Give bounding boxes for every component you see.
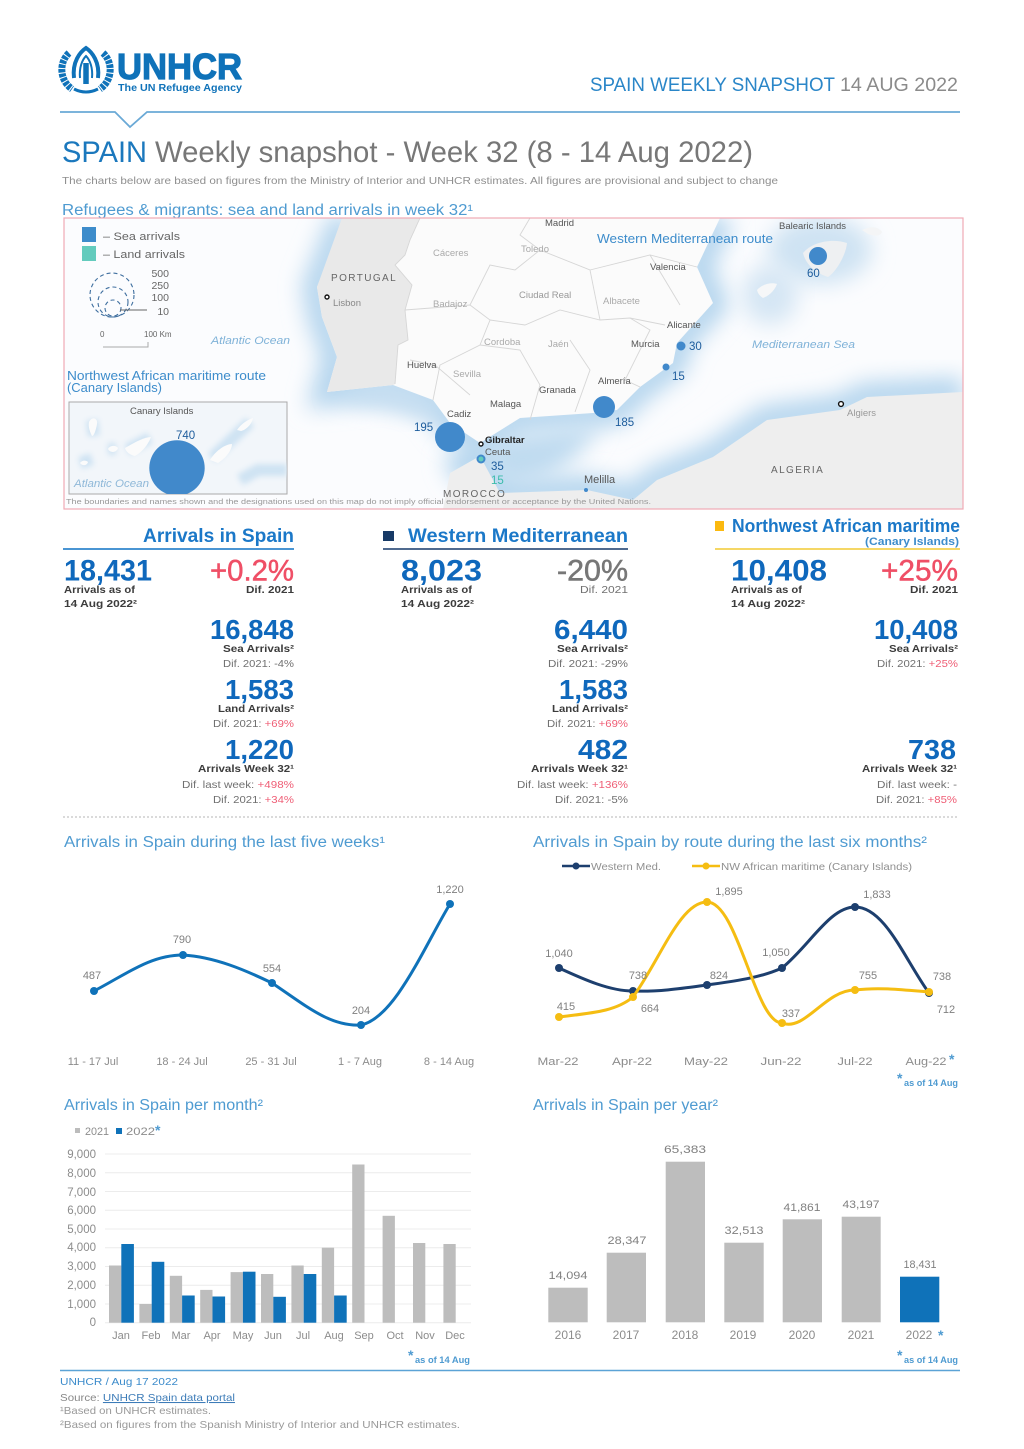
panel: Western Mediterranean: Dif. last week: +136% [517, 779, 628, 791]
panel: map: Lisbon [333, 298, 361, 309]
header rule with notch [60, 112, 960, 127]
panel: map: Melilla [584, 474, 616, 486]
chart: by route: 824 [710, 970, 728, 982]
sea labels [210, 335, 855, 351]
chart: per year: 18,431 [904, 1259, 936, 1271]
Balearic Islands [803, 241, 847, 277]
chart: by route: 1,895 [715, 886, 743, 898]
panel: Northwest African maritime: Sea Arrivals² [889, 643, 959, 655]
map bubbles [435, 247, 827, 492]
chart: last five weeks: 204 [352, 1005, 370, 1017]
place labels [433, 244, 640, 380]
panel: map: Alicante [667, 320, 701, 331]
panel: Northwest African maritime: 738 [908, 734, 956, 765]
panel: Northwest African maritime: Dif. 2021: +25% [877, 658, 958, 670]
chart: by route: Jul-22 [838, 1056, 872, 1068]
map legend: 10 [157, 306, 169, 318]
chart: per month: Jun [264, 1330, 282, 1342]
panel: arrivals in Spain: 1,220 [225, 734, 294, 765]
chart: per year: 2016 [555, 1328, 582, 1342]
place labels: Badajoz [433, 299, 468, 310]
chart: per year: 41,861 [784, 1202, 820, 1214]
panel: arrivals in Spain: 16,848 [210, 614, 294, 645]
chart: per year: 65,383 [664, 1144, 706, 1156]
panel: Northwest African maritime: Dif. 2021 [910, 584, 958, 596]
place labels: Cáceres [433, 248, 469, 259]
heading: Arrivals in Spain during the last five weeks¹ [64, 834, 385, 851]
chart: per month: 8,000 [67, 1168, 96, 1180]
chart: per month: Jan [112, 1330, 130, 1342]
panel: map [64, 216, 963, 509]
panel: map: Gibraltar [485, 435, 525, 446]
panel: Northwest African maritime: 10,408 [874, 614, 958, 645]
chart: by route [533, 834, 958, 1089]
map legend: 500 [151, 268, 169, 280]
footer: ¹Based on UNHCR estimates. [60, 1405, 211, 1417]
panel: arrivals in Spain: Arrivals Week 32¹ [198, 763, 295, 775]
panel: map: PORTUGAL [331, 273, 397, 284]
chart: per month [64, 1097, 471, 1366]
chart: by route: May-22 [684, 1056, 728, 1068]
map legend: 250 [151, 280, 169, 292]
chart: by route: Aug-22 [906, 1056, 946, 1068]
route label: Western Mediterranean: Western Mediterranean route [597, 232, 773, 246]
chart: per month: 2,000 [67, 1280, 96, 1292]
title: SPAIN [62, 136, 147, 169]
map legend: 100 Km [144, 330, 172, 339]
header label: 14 AUG 2022 [840, 75, 958, 96]
map legend: – Sea arrivals [103, 231, 181, 243]
chart: last five weeks [64, 834, 474, 1068]
panel: map: Madrid [545, 218, 574, 229]
chart: per year: 43,197 [842, 1199, 880, 1211]
series: Western Med [555, 903, 933, 997]
UNHCR logo [62, 46, 242, 94]
chart: per year: 2022 [906, 1328, 933, 1342]
legend [562, 861, 912, 873]
panel: Northwest African maritime: Dif. 2021: +85% [876, 794, 957, 806]
panel: arrivals in Spain: 18,431 [64, 554, 152, 588]
chart: per month: 5,000 [67, 1224, 96, 1236]
map disclaimer: The boundaries and names shown and the designations used on this map do not imply official endorsement or acceptance by the United Nations. [66, 499, 651, 506]
map bubble values: 15 [491, 475, 504, 487]
chart: by route: 1,050 [762, 947, 790, 959]
panel: arrivals in Spain: Dif. 2021 [246, 584, 294, 596]
chart: per month: Dec [445, 1330, 465, 1342]
panel: map: Cadiz [447, 409, 472, 420]
panel: Western Mediterranean: Dif. 2021: -5% [555, 794, 628, 806]
panel: map: Balearic Islands [779, 221, 846, 232]
panel: arrivals in Spain: Sea Arrivals² [223, 643, 295, 655]
map legend: 100 [151, 292, 169, 304]
chart: by route: 664 [641, 1003, 659, 1015]
series: NW African [555, 898, 933, 1027]
map heading: Refugees & migrants: sea and land arrivals in week 32¹ [62, 202, 473, 219]
panel: arrivals in Spain: 1,583 [225, 674, 294, 705]
title: Weekly snapshot - Week 32 (8 - 14 Aug 2022) [155, 136, 753, 169]
map bubble values: 195 [414, 422, 433, 434]
note: * [897, 1347, 903, 1363]
place labels: Albacete [603, 296, 640, 307]
panel: map: Huelva [407, 360, 437, 371]
sea halo [317, 218, 720, 443]
chart: per month: Nov [415, 1330, 435, 1342]
chart: per month: 7,000 [67, 1187, 96, 1199]
panel: map: Ceuta [485, 447, 511, 458]
chart: by route: Apr-22 [612, 1056, 652, 1068]
map legend: – Land arrivals [103, 249, 186, 261]
chart: per month: Sep [354, 1330, 374, 1342]
inset: Canary Islands [69, 402, 287, 496]
chart: per year: * [938, 1327, 944, 1343]
note: as of 14 Aug [904, 1355, 958, 1366]
chart: last five weeks: 1 - 7 Aug [338, 1056, 382, 1068]
panel: Northwest African maritime: 10,408 [731, 554, 827, 588]
panel: Western Mediterranean: Land Arrivals² [552, 703, 629, 715]
chart: per month: Feb [142, 1330, 160, 1342]
chart: last five weeks: 487 [83, 970, 101, 982]
panel: arrivals in Spain [63, 526, 295, 806]
chart: by route: 712 [937, 1004, 955, 1016]
map bubble values: 60 [807, 268, 820, 280]
panel: Western Mediterranean: -20% [557, 554, 628, 588]
panel: map: Algiers [847, 408, 876, 419]
legend: Western Med. [591, 861, 661, 873]
panel: Northwest African maritime: 14 Aug 2022² [731, 598, 806, 610]
panel: arrivals in Spain: Dif. 2021: +34% [213, 794, 294, 806]
panel: Western Mediterranean: 14 Aug 2022² [401, 598, 475, 610]
header label [590, 75, 958, 96]
panel: map: Almería [598, 376, 631, 387]
bars [548, 1162, 939, 1322]
chart: last five weeks: 25 - 31 Jul [245, 1056, 297, 1068]
panel: Western Mediterranean: 482 [578, 734, 628, 765]
land: Portugal [317, 218, 420, 392]
subtitle: The charts below are based on figures from the Ministry of Interior and UNHCR estimates. All figures are provisional and subject to change [62, 176, 779, 187]
panel: Northwest African maritime [715, 516, 960, 806]
chart: per month: May [233, 1330, 254, 1342]
chart: by route: 738 [933, 971, 951, 983]
panel: map: Granada [539, 385, 577, 396]
note: * [897, 1070, 903, 1086]
legend: 2021 [85, 1126, 109, 1138]
panel: Northwest African maritime: Dif. last week: - [877, 779, 958, 791]
chart: per year: 32,513 [724, 1225, 764, 1237]
chart: per month: 9,000 [67, 1149, 96, 1161]
panel: map: ALGERIA [771, 465, 824, 476]
chart: per year: 2021 [848, 1328, 875, 1342]
chart: by route: 415 [557, 1001, 575, 1013]
place labels: Cordoba [484, 337, 521, 348]
chart: per month: Oct [386, 1330, 404, 1342]
note [897, 1347, 958, 1366]
panel: arrivals in Spain: Dif. 2021: -4% [223, 658, 294, 670]
legend: 2022 [126, 1126, 155, 1138]
panel: map: MOROCCO [443, 489, 506, 500]
map bubble values: 740 [176, 430, 195, 442]
chart: by route: 337 [782, 1008, 800, 1020]
panel: Western Mediterranean: Dif. 2021: -29% [548, 658, 628, 670]
heading: Arrivals in Spain per year² [533, 1097, 718, 1114]
heading: Arrivals in Spain by route during the last six months² [533, 834, 927, 851]
chart: by route: 755 [859, 970, 877, 982]
sea labels: Mediterranean Sea [752, 339, 855, 351]
chart: by route: * [949, 1051, 955, 1067]
panel: map: Malaga [490, 399, 522, 410]
map bubble values: 35 [491, 461, 504, 473]
chart: per month: 6,000 [67, 1205, 96, 1217]
map bubble values [176, 268, 820, 487]
chart: last five weeks: 18 - 24 Jul [156, 1056, 208, 1068]
chart: per month: Apr [203, 1330, 221, 1342]
panel: Western Mediterranean: Arrivals as of [401, 584, 473, 596]
chart: per year: 2017 [613, 1328, 640, 1342]
chart: per month: Jul [296, 1330, 310, 1342]
note [897, 1070, 958, 1089]
place labels: Jaén [548, 339, 569, 350]
chart: by route: 1,040 [545, 948, 573, 960]
chart: by route: 1,833 [863, 889, 891, 901]
note: * [408, 1347, 414, 1363]
chart: per month: Mar [172, 1330, 191, 1342]
map bubble values: 185 [615, 417, 634, 429]
map bubble values: 15 [672, 371, 685, 383]
line series [90, 900, 454, 1029]
chart: per year: 28,347 [608, 1235, 646, 1247]
panel: Western Mediterranean [383, 526, 629, 806]
chart: last five weeks: 554 [263, 963, 281, 975]
footer: UNHCR / Aug 17 2022 [60, 1376, 178, 1388]
panel: Northwest African maritime: +25% [881, 554, 958, 588]
panel: arrivals in Spain: Dif. 2021: +69% [213, 718, 294, 730]
region borders [395, 218, 697, 420]
chart: last five weeks: 8 - 14 Aug [424, 1056, 474, 1068]
inset: Canary Islands: Canary Islands [130, 406, 194, 417]
chart: by route: 738 [629, 970, 647, 982]
route label: Northwest African: Northwest African maritime route [67, 369, 266, 383]
UNHCR logo: UNHCR [117, 46, 242, 87]
panel: arrivals in Spain: +0.2% [210, 554, 294, 588]
note: as of 14 Aug [904, 1078, 958, 1089]
chart: per month: Aug [324, 1330, 344, 1342]
panel: map: Valencia [650, 262, 686, 273]
note [408, 1347, 470, 1366]
bars 2021 [109, 1164, 456, 1323]
place labels: Toledo [521, 244, 549, 255]
panel: Western Mediterranean: Western Mediterranean [408, 526, 628, 547]
panel: Western Mediterranean: 1,583 [559, 674, 628, 705]
footer [60, 1376, 460, 1431]
map legend [82, 227, 186, 347]
panel: Northwest African maritime: Arrivals Week 32¹ [862, 763, 958, 775]
chart: per month: 3,000 [67, 1261, 96, 1273]
chart: per year: 2018 [672, 1328, 699, 1342]
panel: map: Murcia [631, 339, 660, 350]
panel: arrivals in Spain: Land Arrivals² [218, 703, 295, 715]
chart: per year [533, 1097, 958, 1366]
note: as of 14 Aug [415, 1355, 470, 1366]
chart: per year: 2019 [730, 1328, 757, 1342]
route label: Northwest African: (Canary Islands) [67, 381, 162, 395]
chart: last five weeks: 790 [173, 934, 191, 946]
panel: arrivals in Spain: Arrivals in Spain [143, 526, 294, 547]
panel: Western Mediterranean: 8,023 [401, 554, 482, 588]
chart: per month: 0 [90, 1317, 96, 1329]
panel: Western Mediterranean: 6,440 [554, 614, 628, 645]
legend [75, 1122, 161, 1138]
panel: Western Mediterranean: Arrivals Week 32¹ [531, 763, 629, 775]
header label: SPAIN WEEKLY SNAPSHOT [590, 75, 835, 96]
chart: last five weeks: 1,220 [436, 884, 464, 896]
panel: arrivals in Spain: 14 Aug 2022² [64, 598, 138, 610]
map legend: 0 [100, 330, 105, 339]
inset: Canary Islands: Atlantic Ocean [73, 478, 149, 490]
bars 2022 [121, 1244, 347, 1323]
UNHCR logo: The UN Refugee Agency [118, 82, 242, 94]
footer: ²Based on figures from the Spanish Ministry of Interior and UNHCR estimates. [60, 1419, 460, 1431]
panel: Northwest African maritime: (Canary Islands) [865, 536, 959, 548]
panel: Western Mediterranean: Dif. 2021 [580, 584, 628, 596]
panel: Western Mediterranean: Dif. 2021: +69% [547, 718, 628, 730]
legend: NW African maritime (Canary Islands) [721, 861, 912, 873]
chart: per month: 1,000 [67, 1299, 96, 1311]
place labels: Sevilla [453, 369, 482, 380]
panel: Western Mediterranean: Sea Arrivals² [557, 643, 629, 655]
sea labels: Atlantic Ocean [210, 335, 290, 347]
grid [105, 1154, 471, 1323]
panel: Northwest African maritime: Arrivals as of [731, 584, 803, 596]
chart: last five weeks: 11 - 17 Jul [68, 1056, 118, 1068]
land: Morocco and Algeria [443, 392, 963, 509]
heading: Arrivals in Spain per month² [64, 1097, 263, 1114]
chart: by route: Jun-22 [760, 1056, 802, 1068]
panel: arrivals in Spain: Dif. last week: +498% [182, 779, 294, 791]
map bubble values: 30 [689, 341, 702, 353]
land: Spain [317, 218, 720, 443]
chart: per month: 4,000 [67, 1242, 96, 1254]
legend: * [155, 1122, 161, 1138]
chart: per year: 14,094 [548, 1270, 588, 1282]
icon: laurel and sheltering hands [62, 48, 110, 92]
panel: arrivals in Spain: Arrivals as of [64, 584, 136, 596]
chart: by route: Mar-22 [538, 1056, 578, 1068]
place labels: Ciudad Real [519, 290, 571, 301]
panel: Northwest African maritime: Northwest African maritime [732, 516, 960, 536]
footer: Source: UNHCR Spain data portal [60, 1392, 235, 1404]
chart: per year: 2020 [789, 1328, 816, 1342]
